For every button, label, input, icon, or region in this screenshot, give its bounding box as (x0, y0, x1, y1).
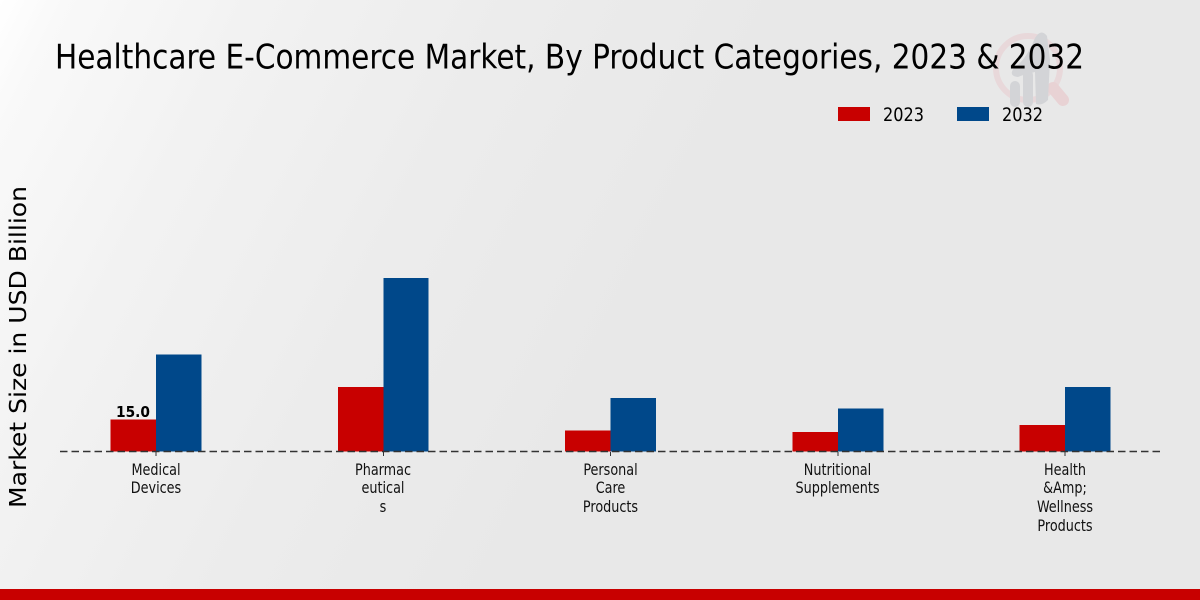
legend (838, 105, 1043, 126)
bar chart (60, 278, 1160, 456)
group: Pharmaceuticals (338, 278, 428, 452)
x label: Nutritional Supplements: Nutritional (804, 460, 871, 479)
x label: Pharmaceuticals: Pharmac (355, 460, 411, 479)
x label: Personal Care Products: Products (583, 497, 638, 516)
x label: Personal Care Products: Care (596, 478, 625, 497)
baseline (60, 450, 1160, 452)
group: Personal Care Products (565, 398, 656, 452)
tick marks (156, 452, 1065, 456)
x label: Health & Wellness Products: Wellness (1037, 497, 1093, 516)
group: Medical Devices (110, 354, 202, 452)
data label: 15.0 (116, 403, 150, 421)
x label: Medical Devices: Medical (131, 460, 181, 479)
group: Nutritional Supplements (792, 408, 884, 452)
title: Healthcare E-Commerce Market, By Product Categories, 2023 & 2032 (55, 38, 1084, 78)
footer bar (0, 589, 1200, 600)
legend label 2032: 2032 (1002, 105, 1043, 126)
watermark logo icon (996, 32, 1063, 107)
x label: Pharmaceuticals: s (380, 497, 386, 516)
legend swatch 2032 (957, 107, 989, 121)
y axis title: Market Size in USD Billion (4, 186, 32, 508)
x label: Health & Wellness Products: &Amp; (1043, 478, 1087, 497)
x label: Medical Devices: Devices (131, 478, 181, 497)
x label: Pharmaceuticals: eutical (362, 478, 404, 497)
x label: Nutritional Supplements: Supplements (795, 478, 880, 497)
x label: Health & Wellness Products: Products (1037, 516, 1093, 535)
group: Health & Wellness Products (1020, 387, 1110, 452)
x label: Personal Care Products: Personal (583, 460, 638, 479)
legend label 2023: 2023 (883, 105, 924, 126)
legend swatch 2023 (838, 107, 870, 121)
x label: Health & Wellness Products: Health (1044, 460, 1086, 479)
